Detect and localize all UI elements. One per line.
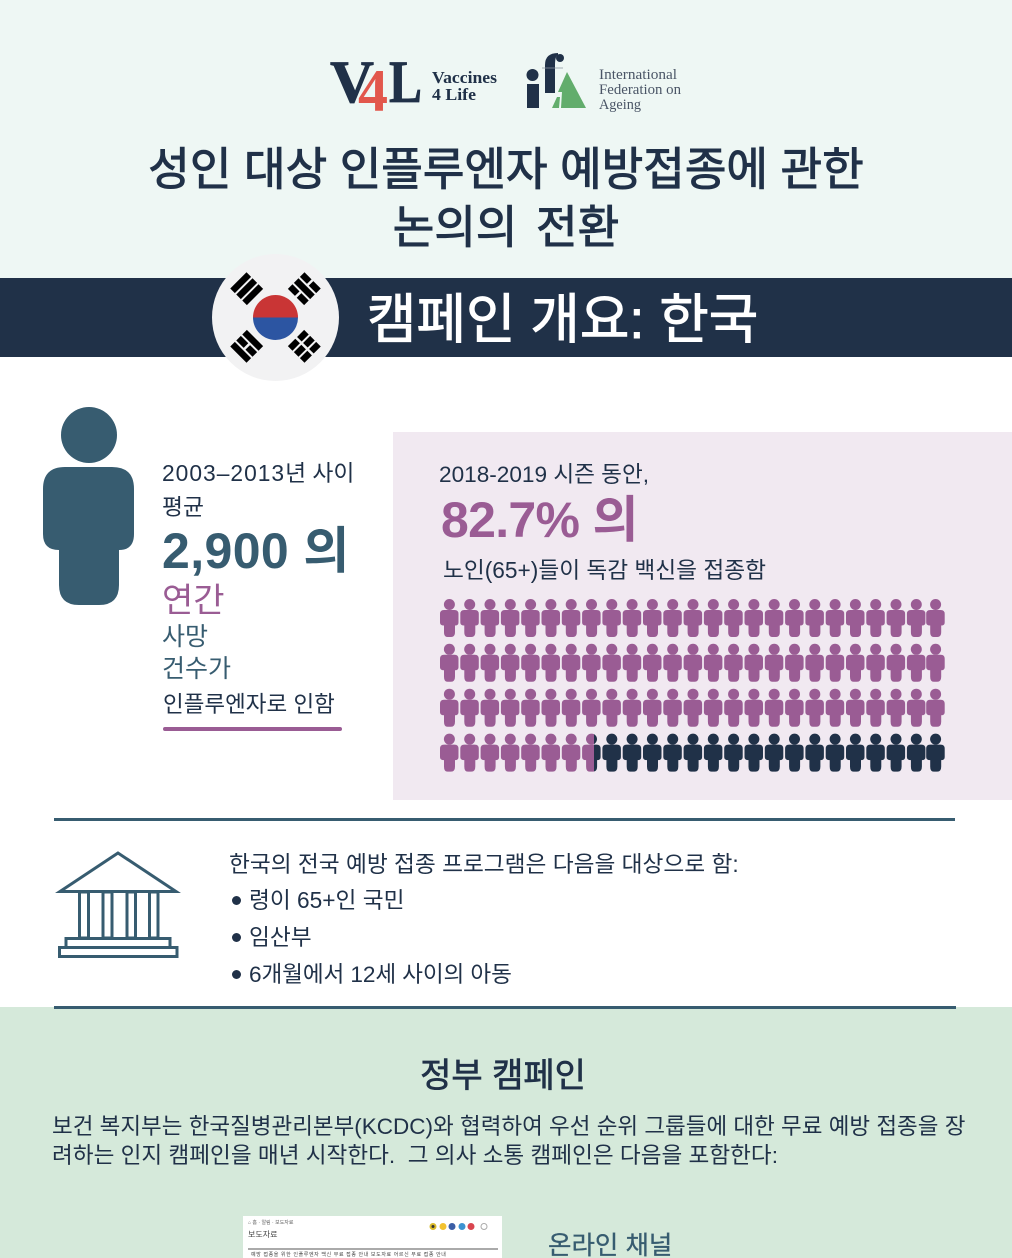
- stat: annual deaths: 사망: [162, 623, 208, 651]
- icon: person: [43, 407, 134, 605]
- stat: 82.7%: 82.7% 의: [441, 492, 638, 548]
- text: national program: [229, 851, 739, 987]
- text: campaign description: [52, 1114, 965, 1168]
- banner heading: 캠페인 개요: 한국: [367, 290, 758, 350]
- panel: government campaign: [0, 1007, 1012, 1258]
- logo: International Federation on Ageing: Ageing: [599, 97, 641, 113]
- heading: government campaign: 정부 캠페인: [420, 1057, 586, 1095]
- stat: annual deaths: 연간: [162, 582, 225, 620]
- logo: Vaccines 4 Life: [330, 49, 497, 124]
- pictogram chart: 82.7% of people: [440, 599, 945, 772]
- logo: International Federation on Ageing: International: [599, 67, 677, 83]
- screenshot: press release page: ⌂ 홈 · 알림 · 보도자료: [248, 1220, 294, 1226]
- logo: Vaccines 4 Life: 4: [358, 58, 388, 124]
- title: 성인 대상 인플루엔자 예방접종에 관한: [148, 144, 864, 195]
- title: 논의의 전환: [393, 202, 619, 253]
- text: campaign description: 려하는 인지 캠페인을 매년 시작한다. 그 의사 소통 캠페인은 다음을 포함한다:: [52, 1143, 778, 1168]
- screenshot: press release page: 예방 접종을 위한 인플루엔자 백신 무료 접종 안내 보도자료 어르신 무료 접종 안내: [251, 1252, 446, 1258]
- text: national program: 령이 65+인 국민: [249, 887, 404, 913]
- stat: annual deaths: 평균: [162, 494, 204, 520]
- screenshot: press release page: [243, 1216, 502, 1258]
- logo: Vaccines 4 Life: V: [330, 49, 374, 115]
- panel: vaccination rate: [393, 432, 1012, 800]
- text: national program: 임산부: [249, 924, 312, 950]
- logo: International Federation on Ageing: [526, 53, 682, 113]
- text: seniors vaccinated: 노인(65+)들이 독감 백신을 접종함: [443, 557, 766, 583]
- stat: annual deaths: 건수가: [162, 655, 231, 683]
- banner: [0, 278, 1012, 357]
- stat: annual deaths: [162, 460, 354, 731]
- logo: International Federation on Ageing: Federation on: [599, 82, 682, 98]
- logo: Vaccines 4 Life: 4 Life: [432, 85, 476, 104]
- icon: Korean flag: [212, 272, 339, 381]
- text: season: 2018-2019 시즌 동안,: [439, 462, 649, 487]
- logo: Vaccines 4 Life: L: [389, 49, 422, 115]
- title: [148, 144, 864, 253]
- header background: [0, 0, 1012, 278]
- stat: annual deaths: 2,900 의: [162, 523, 350, 579]
- logo: Vaccines 4 Life: Vaccines: [432, 68, 497, 87]
- icon: government building: [55, 851, 181, 958]
- text: national program: 6개월에서 12세 사이의 아동: [249, 962, 512, 987]
- stat: annual deaths: 인플루엔자로 인함: [163, 692, 335, 717]
- text: campaign description: 보건 복지부는 한국질병관리본부(KCDC)와 협력하여 우선 순위 그룹들에 대한 무료 예방 접종을 장: [52, 1114, 965, 1139]
- text: national program: 한국의 전국 예방 접종 프로그램은 다음을 대상으로 함:: [229, 851, 739, 877]
- stat: annual deaths: 2003–2013년 사이: [162, 460, 354, 486]
- screenshot: press release page: 보도자료: [248, 1230, 277, 1239]
